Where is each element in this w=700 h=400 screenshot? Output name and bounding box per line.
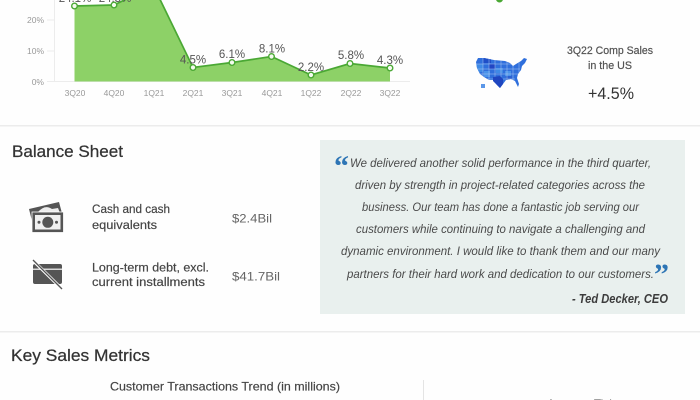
panel: comp sales trend chart xyxy=(27,0,410,98)
label: debt xyxy=(92,262,209,289)
data labels: 5.8% xyxy=(338,50,364,62)
divider xyxy=(0,331,700,332)
data labels: 6.1% xyxy=(219,49,245,61)
x axis labels: 1Q21 xyxy=(144,88,165,98)
quote text: business. Our team has done a fantastic job serving our xyxy=(362,202,640,214)
x axis labels: 3Q20 xyxy=(65,88,86,98)
panel: balance sheet xyxy=(12,142,280,289)
label: debt: current installments xyxy=(92,277,205,289)
trend line xyxy=(74,0,390,75)
label: comp sales xyxy=(567,45,653,72)
column divider xyxy=(423,380,424,400)
opening quote mark: “ xyxy=(334,150,349,183)
label: cash: Cash and cash xyxy=(92,204,170,216)
panel: CEO quote xyxy=(320,140,685,314)
value: comp sales: +4.5% xyxy=(588,84,634,103)
y axis labels: 0% xyxy=(32,77,44,87)
quote text: partners for their hard work and dedication to our customers. xyxy=(346,269,654,281)
panel: US comp sales xyxy=(476,45,653,103)
chart title: customer transactions: Customer Transactions Trend (in millions) xyxy=(110,380,340,394)
quote text: customers while continuing to navigate a challenging and xyxy=(356,224,646,236)
x axis labels: 2Q21 xyxy=(183,88,204,98)
x axis labels: 4Q21 xyxy=(262,88,283,98)
y axis labels: 10% xyxy=(27,46,44,56)
quote background xyxy=(320,140,685,314)
data labels: 8.1% xyxy=(259,44,285,56)
label: cash: equivalents xyxy=(92,220,157,232)
quote text: dynamic environment. I would like to thank them and our many xyxy=(341,246,661,258)
data labels: 4.3% xyxy=(377,55,403,67)
value: debt: $41.7Bil xyxy=(232,270,280,284)
data labels xyxy=(59,0,403,74)
label: comp sales: in the US xyxy=(588,60,632,72)
x axis labels: 4Q20 xyxy=(104,88,125,98)
divider xyxy=(0,125,700,126)
quote text: We delivered another solid performance in the third quarter, xyxy=(350,158,651,170)
x axis labels xyxy=(65,88,401,98)
label: comp sales: 3Q22 Comp Sales xyxy=(567,45,653,57)
y axis labels xyxy=(27,15,44,87)
area series xyxy=(74,0,390,82)
quote attribution: - Ted Decker, CEO xyxy=(572,292,668,306)
quote text xyxy=(341,158,661,281)
quote text: driven by strength in project-related categories across the xyxy=(355,180,645,192)
chart axes xyxy=(47,0,410,82)
heading: key sales metrics: Key Sales Metrics xyxy=(11,346,150,365)
data labels: 2.2% xyxy=(298,62,324,74)
y axis labels: 20% xyxy=(27,15,44,25)
icon: cash xyxy=(29,202,64,232)
icon: no credit card xyxy=(33,260,62,289)
closing quote mark: ” xyxy=(654,258,669,291)
heading: balance sheet: Balance Sheet xyxy=(12,142,123,161)
label: cash xyxy=(92,204,170,232)
x axis labels: 2Q22 xyxy=(341,88,362,98)
x axis labels: 3Q21 xyxy=(222,88,243,98)
data markers xyxy=(72,2,393,78)
x axis labels: 1Q22 xyxy=(301,88,322,98)
x axis labels: 3Q22 xyxy=(380,88,401,98)
label: debt: Long-term debt, excl. xyxy=(92,262,209,274)
icon: US map xyxy=(476,56,527,88)
value: cash: $2.4Bil xyxy=(232,212,272,226)
panel: key sales metrics xyxy=(11,346,626,400)
data labels: 4.5% xyxy=(180,54,206,66)
icon: clipped green marker xyxy=(496,0,503,2)
